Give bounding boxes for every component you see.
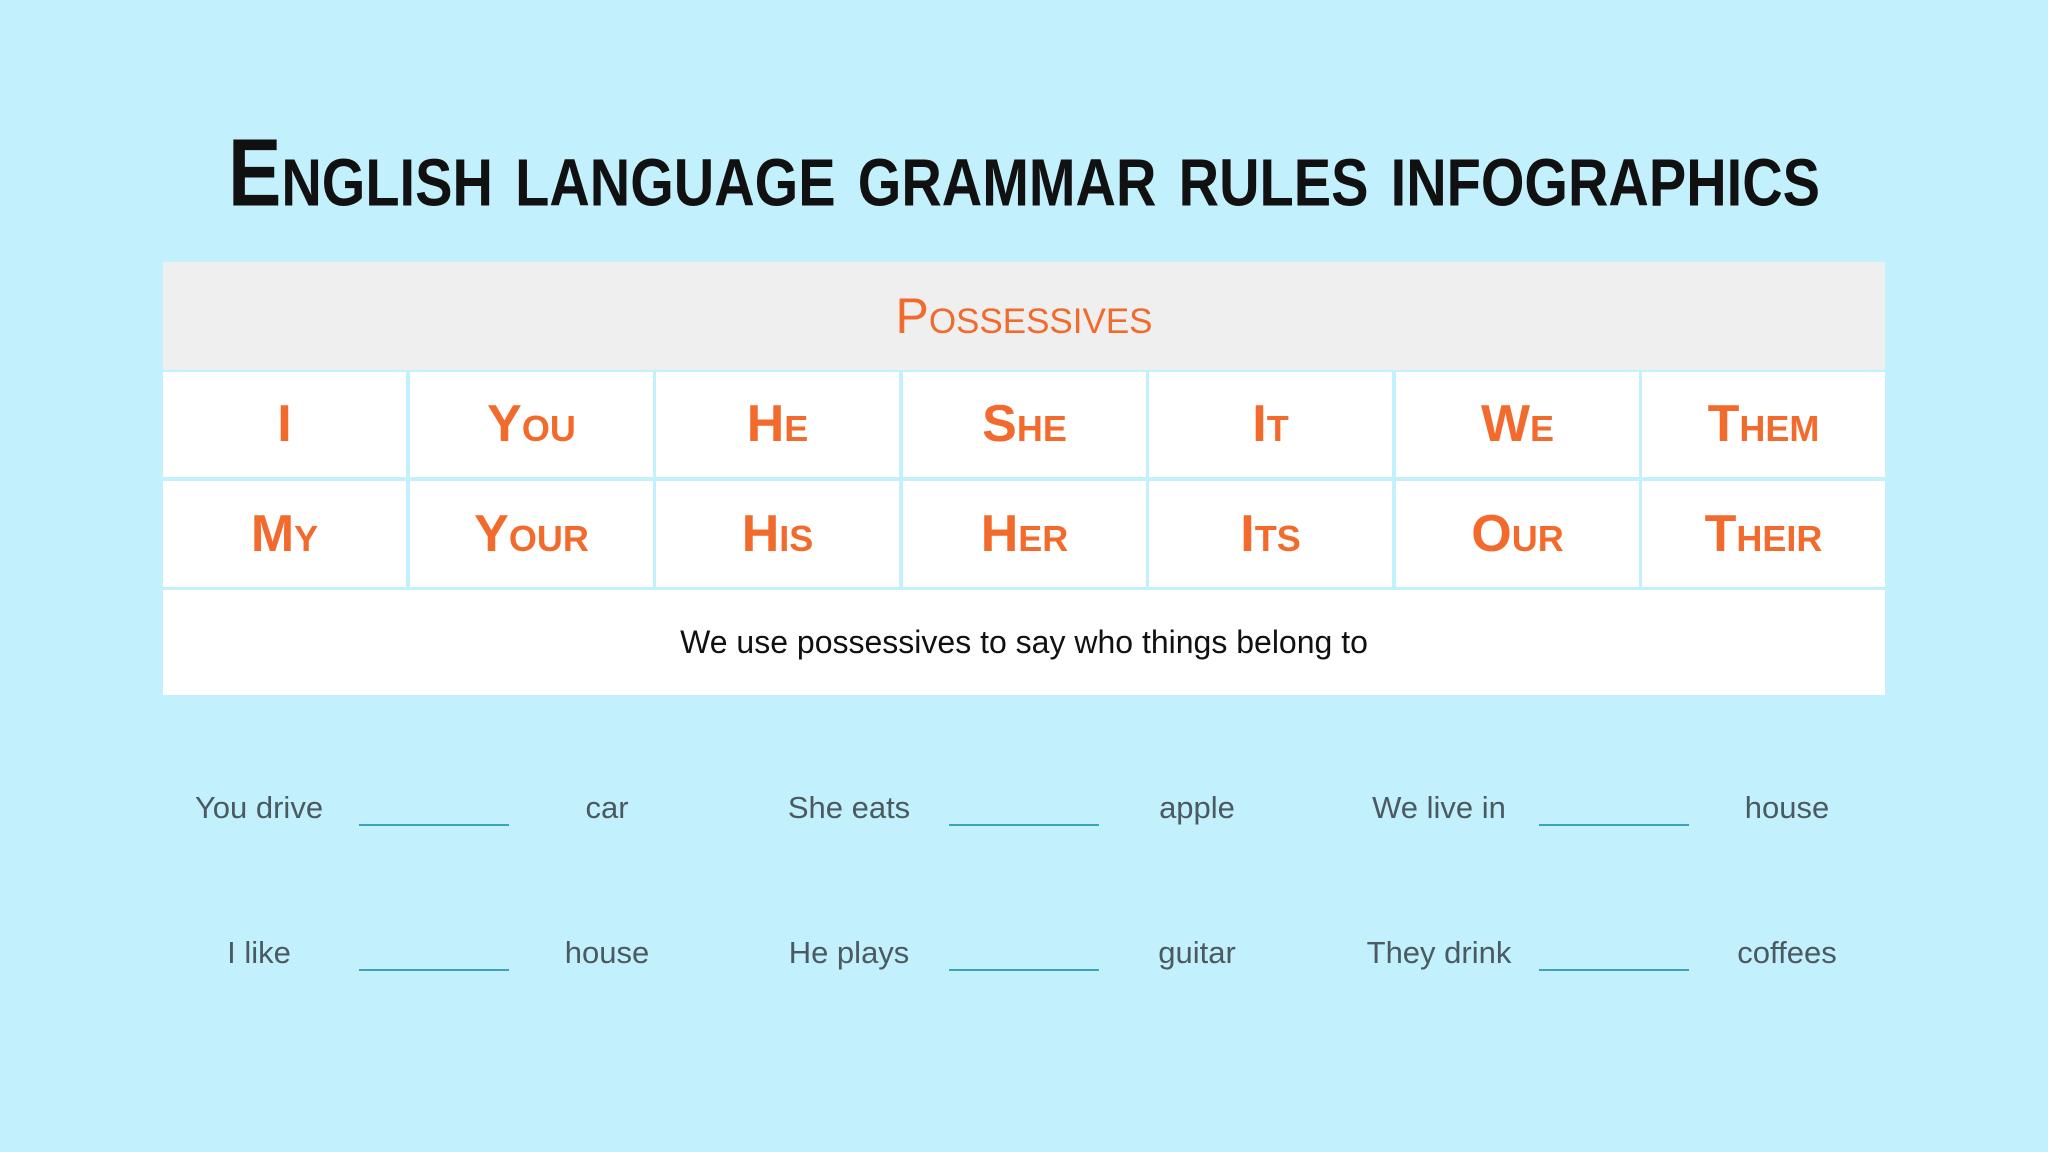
exercises: house <box>1745 790 1829 825</box>
exercises: They drink <box>1367 935 1511 970</box>
subject pronoun row: Our <box>1471 505 1564 563</box>
subject pronoun row: Her <box>981 505 1068 563</box>
subject pronoun row <box>163 372 1885 587</box>
subject pronoun row: You <box>487 395 576 453</box>
subject pronoun row: His <box>742 505 813 563</box>
exercises: We live in <box>1372 790 1506 825</box>
exercises: guitar <box>1158 935 1236 970</box>
exercises <box>195 790 1837 971</box>
subject pronoun row: She <box>982 395 1067 453</box>
subject pronoun row: Your <box>474 505 589 563</box>
subject pronoun row: We <box>1481 395 1554 453</box>
subject pronoun row: I <box>277 395 292 453</box>
subject pronoun row: He <box>747 395 808 453</box>
panel: possessives table <box>163 262 1885 695</box>
description <box>163 590 1885 695</box>
exercises: apple <box>1159 790 1235 825</box>
exercises: You drive <box>195 790 323 825</box>
subject pronoun row: It <box>1252 395 1289 453</box>
subject pronoun row: My <box>251 505 318 563</box>
exercises: house <box>565 935 649 970</box>
table header <box>163 262 1885 370</box>
subject pronoun row: Its <box>1240 505 1301 563</box>
exercises: I like <box>227 935 291 970</box>
description: We use possessives to say who things belong to <box>680 624 1368 660</box>
subject pronoun row: Their <box>1705 505 1822 563</box>
exercises: car <box>585 790 629 825</box>
exercises: He plays <box>789 935 909 970</box>
exercises: She eats <box>788 790 910 825</box>
exercises: coffees <box>1737 935 1837 970</box>
subject pronoun row: Them <box>1708 395 1819 453</box>
table header: Possessives <box>895 288 1153 344</box>
title: English language grammar rules infographics <box>228 119 1820 226</box>
